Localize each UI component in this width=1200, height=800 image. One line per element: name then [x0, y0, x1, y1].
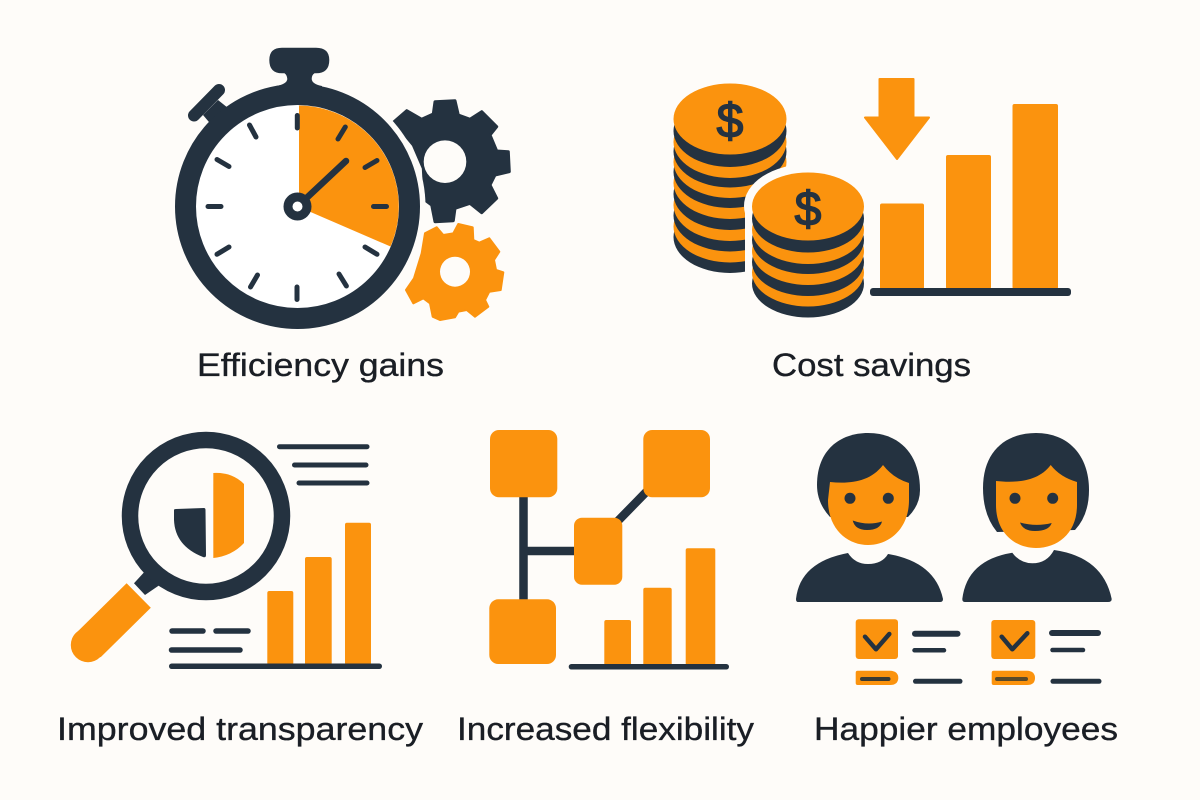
label: increased flexibility: Increased flexibility — [457, 711, 754, 747]
label: cost savings: Cost savings — [772, 347, 971, 383]
icon: checkbox right — [991, 620, 1035, 659]
icon: orange gear — [406, 224, 503, 320]
bar chart: transparency bars — [169, 523, 382, 669]
icon: checkbox left — [856, 619, 898, 659]
icon: down arrow — [865, 79, 929, 159]
text lines: checklist — [914, 633, 1099, 681]
panel: happier employees — [796, 433, 1118, 747]
panel: improved transparency — [57, 440, 423, 747]
bar chart: cost bars — [870, 104, 1071, 296]
icon: magnifying glass — [71, 440, 282, 662]
icon: orange pills — [856, 671, 1035, 685]
icon: dark gear — [394, 101, 509, 222]
icon: person left — [796, 433, 943, 602]
icon: left coin stack — [674, 84, 786, 273]
icon: left coin stack: $ — [717, 95, 743, 148]
label: efficiency gains: Efficiency gains — [197, 347, 444, 383]
icon: person right — [962, 433, 1112, 602]
label: improved transparency: Improved transparency — [57, 711, 423, 747]
flow nodes — [489, 430, 710, 664]
panel: efficiency gains — [170, 48, 509, 383]
text lines: upper — [280, 447, 367, 483]
panel: increased flexibility — [457, 430, 754, 747]
panel: cost savings — [674, 79, 1071, 383]
label: happier employees: Happier employees — [814, 711, 1118, 747]
icon: right coin stack: $ — [795, 183, 821, 236]
icon: stopwatch — [170, 48, 426, 334]
icon: right coin stack — [744, 164, 872, 318]
connectors — [523, 486, 652, 605]
text lines: lower — [172, 631, 248, 650]
bar chart: flexibility bars — [569, 548, 729, 670]
